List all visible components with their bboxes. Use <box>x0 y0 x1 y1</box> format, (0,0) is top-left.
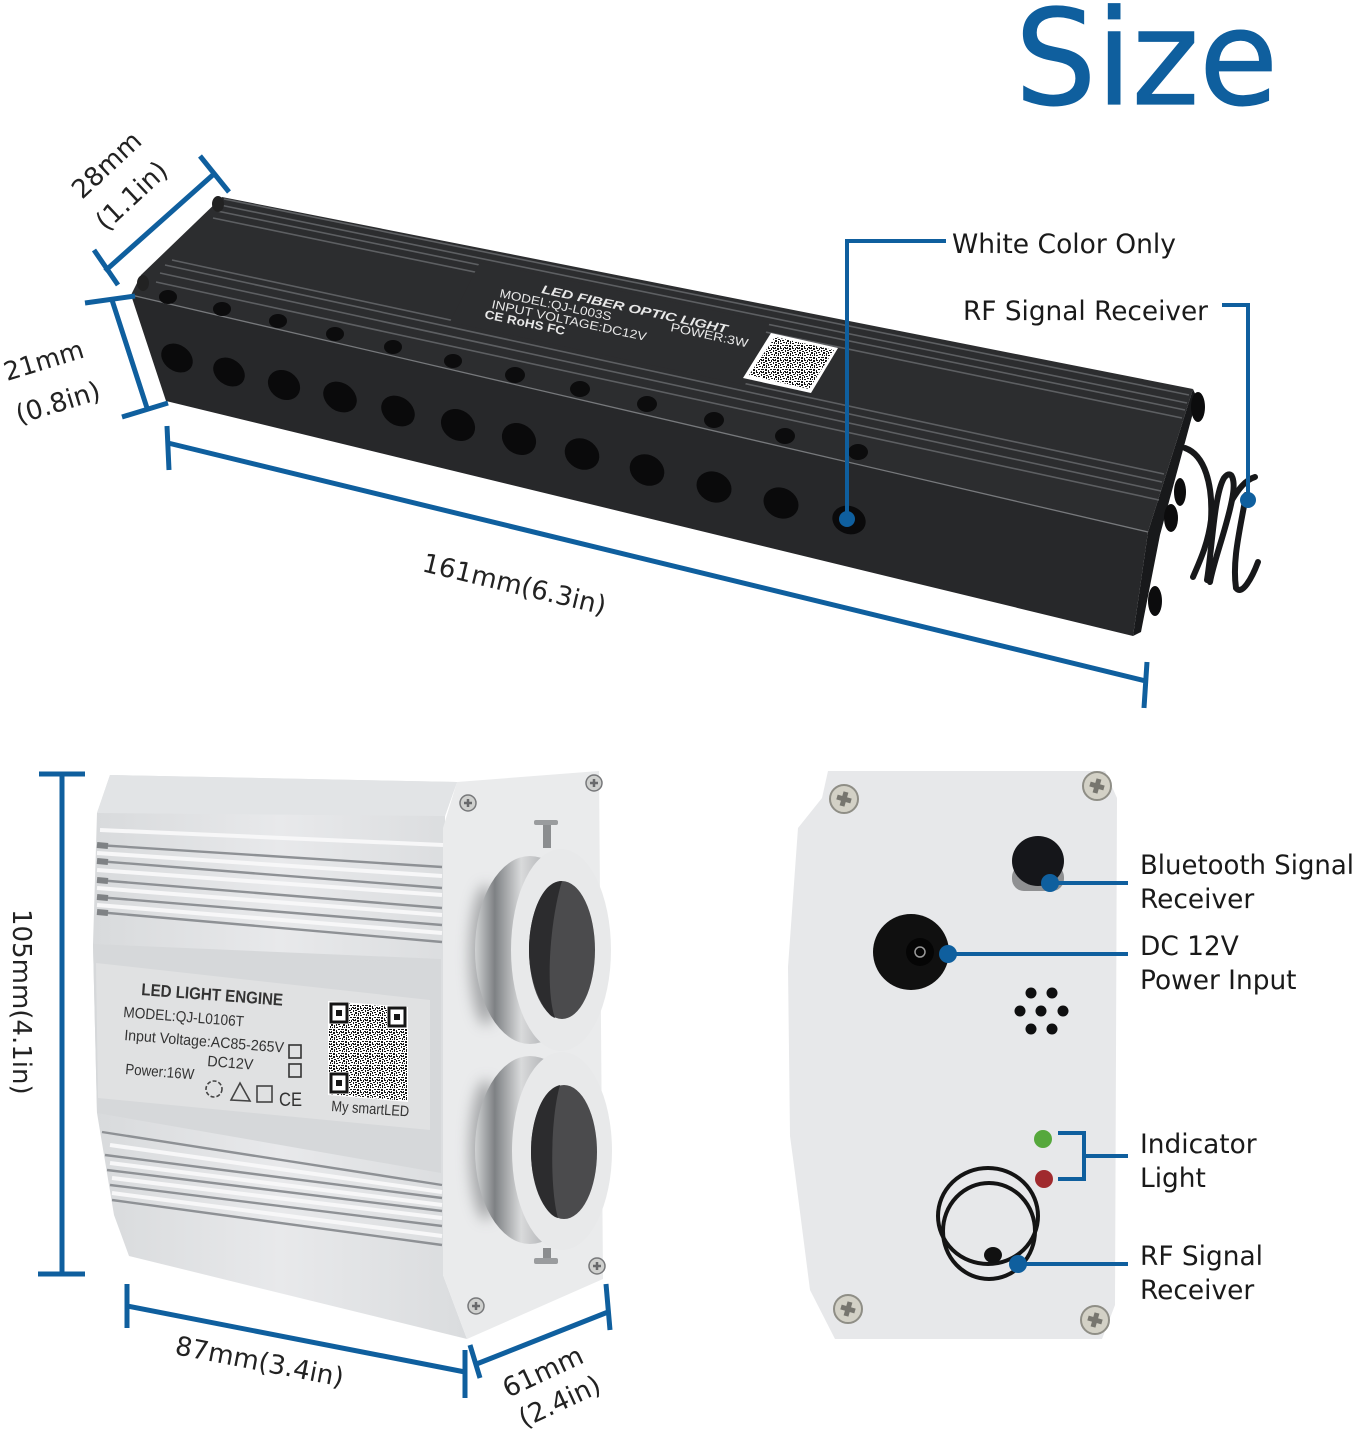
icon: bluetooth antenna knob <box>1012 836 1064 891</box>
product: silver end panel <box>788 771 1117 1339</box>
dimension: 105mm height <box>6 774 85 1274</box>
QR code <box>743 333 838 393</box>
callout: RF signal receiver top <box>963 296 1256 508</box>
dimension: 161mm length: 161mm(6.3in) <box>419 549 609 622</box>
callout: RF signal receiver bottom: RF Signal <box>1140 1241 1263 1272</box>
callout: indicator light <box>1058 1129 1257 1194</box>
icon: antenna wire loop <box>938 1168 1038 1279</box>
callout: RF signal receiver bottom: Receiver <box>1140 1275 1254 1306</box>
icon: DC power socket <box>873 914 949 990</box>
icon: indicator LEDs <box>1034 1130 1053 1188</box>
engine label text: DC12V <box>207 1053 254 1074</box>
product label text <box>483 282 750 351</box>
callout: RF signal receiver bottom <box>1009 1241 1263 1306</box>
antenna coil <box>1185 448 1258 590</box>
callout: DC 12V power input <box>939 931 1297 996</box>
dimension: 21mm height <box>0 296 168 431</box>
callout: DC 12V power input: Power Input <box>1140 965 1297 996</box>
product label text: POWER:3W <box>669 320 750 351</box>
engine label text: CE <box>279 1090 302 1111</box>
callout: indicator light: Indicator <box>1140 1129 1257 1160</box>
screws on engine <box>460 775 605 1314</box>
callout: RF signal receiver top: RF Signal Receiver <box>963 296 1208 327</box>
callout: indicator light: Light <box>1140 1163 1206 1194</box>
engine label plate <box>93 944 441 1173</box>
engine label text: My smartLED <box>331 1098 410 1120</box>
dimension: 105mm height: 105mm(4.1in) <box>6 909 36 1095</box>
product: silver light engine <box>93 771 612 1339</box>
product: black fiber optic light box <box>131 196 1258 636</box>
dimension: 28mm width <box>66 126 229 285</box>
product label text: CE RoHS FC <box>483 307 567 338</box>
dimension: 87mm width <box>127 1284 465 1398</box>
dimension: 28mm width: (1.1in) <box>90 155 174 237</box>
product label text: INPUT VOLTAGE:DC12V <box>490 297 648 344</box>
lower lens ring <box>475 1052 612 1250</box>
engine label text <box>123 980 410 1120</box>
engine label text: LED LIGHT ENGINE <box>141 980 284 1010</box>
upper lens ring <box>475 849 611 1051</box>
callout: white color only <box>839 229 1176 527</box>
dimension: 21mm height: 21mm <box>0 335 88 388</box>
dimension: 61mm depth <box>470 1284 610 1430</box>
callout: bluetooth signal receiver <box>1041 850 1354 915</box>
engine label text: Power:16W <box>125 1061 196 1083</box>
engine label text: MODEL:QJ-L0106T <box>123 1004 245 1030</box>
dimension: 28mm width: 28mm <box>66 126 148 205</box>
dimension: 87mm width: 87mm(3.4in) <box>173 1331 346 1394</box>
dimension: 21mm height: (0.8in) <box>12 376 104 431</box>
icon: speaker holes <box>1014 988 1068 1034</box>
QR code <box>328 1001 408 1102</box>
icons: recycling marks <box>206 1081 272 1102</box>
callout: white color only: White Color Only <box>952 229 1176 260</box>
product label text: LED FIBER OPTIC LIGHT <box>540 282 731 337</box>
shadow behind lenses <box>470 885 502 1220</box>
callout: bluetooth signal receiver: Receiver <box>1140 884 1254 915</box>
product label text: MODEL:QJ-L003S <box>498 286 613 324</box>
dimension: 61mm depth: 61mm <box>498 1340 588 1404</box>
dimension: 161mm length <box>167 426 1147 708</box>
callout: bluetooth signal receiver: Bluetooth Signal <box>1140 850 1354 881</box>
engine label text: Input Voltage:AC85-265V <box>124 1027 285 1057</box>
callout: DC 12V power input: DC 12V <box>1140 931 1239 962</box>
